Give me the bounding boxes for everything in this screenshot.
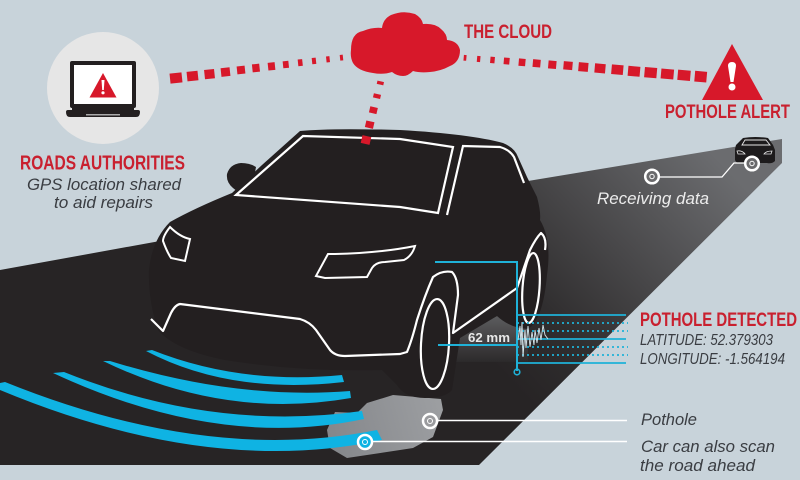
left headlight [163,227,190,261]
rear wheel [520,252,542,324]
measurement label: 62 mm [468,330,510,345]
text: scan the road ahead: Car can also scan [641,437,775,456]
text: scan the road ahead: the road ahead [640,456,756,475]
text: receiving data: Receiving data [597,189,709,208]
dashed link: cloud to car [361,81,384,145]
scan arcs [0,350,382,451]
text: coordinates: LATITUDE: 52.379303 [640,332,773,349]
front wheel [419,298,451,390]
icon: cloud [351,12,460,76]
icon: alert triangle [702,44,763,100]
text: gps location [27,175,182,212]
text: gps location: to aid repairs [54,193,153,212]
scan target [358,435,372,449]
vibration waveform [518,322,548,357]
right headlight [316,246,415,278]
text: scan the road ahead [640,437,775,475]
receiving data leader [645,157,759,183]
road [0,139,782,465]
heading: roads authorities: ROADS AUTHORITIES [20,152,185,174]
shaded road under car [452,316,528,362]
pothole target [423,414,437,428]
text: coordinates [640,332,785,368]
car body [149,129,548,398]
text: pothole label: Pothole [641,410,697,429]
sensor lines [435,262,628,375]
icon: laptop alert [47,32,159,144]
icon: distant car [735,137,775,163]
side mirror [227,163,256,192]
pothole shape [327,395,443,458]
target: road [645,170,659,183]
grille and bumper line [151,233,546,356]
car silhouette [149,129,548,398]
dashed link: cloud to alert [463,55,707,83]
pothole leader [423,414,627,428]
dashed link: cloud to authorities [170,55,343,84]
text: gps location: GPS location shared [27,175,182,194]
target: distant car [745,157,759,170]
heading: the cloud: THE CLOUD [464,22,552,43]
road ahead leader [358,435,627,449]
side window outline [447,146,524,215]
windscreen outline [236,136,453,213]
